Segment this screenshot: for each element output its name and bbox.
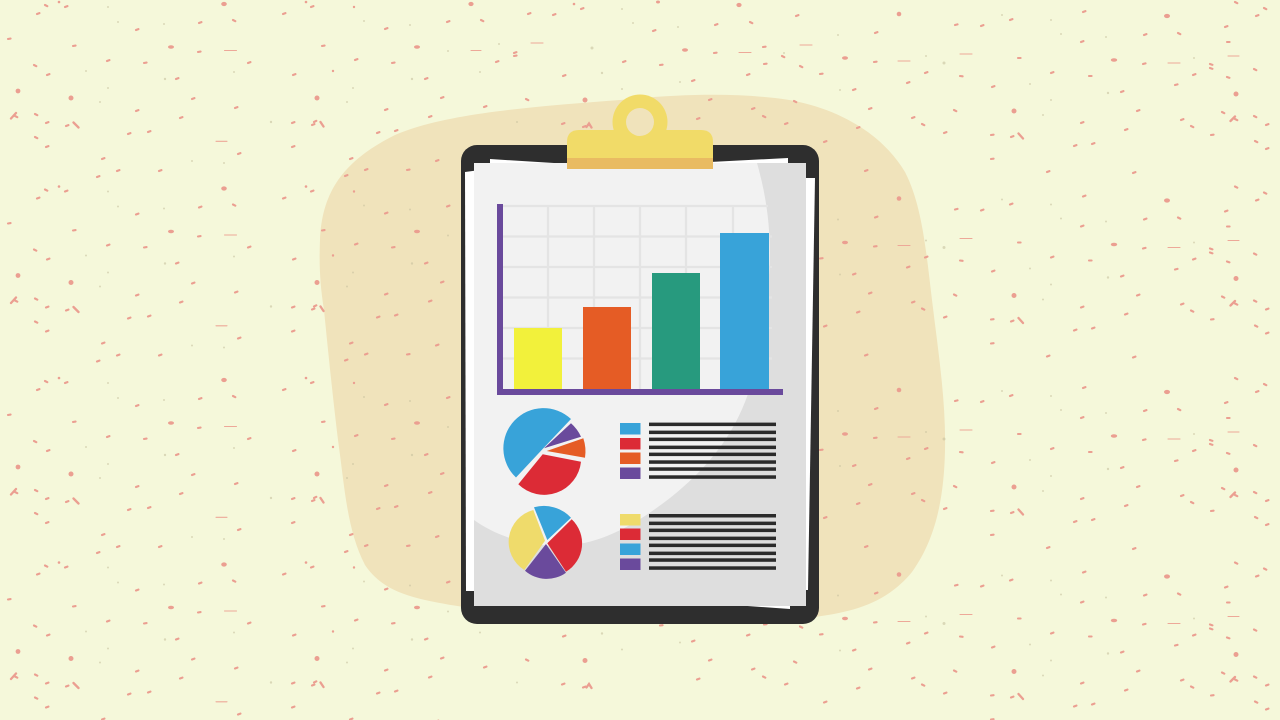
bar: yellow bbox=[514, 328, 562, 389]
clipboard bbox=[461, 94, 819, 624]
text lines bbox=[649, 514, 776, 570]
chart grid bbox=[503, 205, 772, 389]
slice: red bbox=[518, 454, 581, 495]
back sheets of paper bbox=[465, 158, 815, 609]
slice: yellow bbox=[509, 510, 545, 570]
slice: red bbox=[547, 519, 582, 572]
clip ring bbox=[612, 94, 668, 150]
chart axes bbox=[497, 204, 783, 395]
slice: orange bbox=[547, 438, 585, 458]
swatches bbox=[620, 423, 640, 479]
legend 2 bbox=[620, 514, 776, 570]
slice: purple bbox=[525, 544, 566, 579]
bar: orange bbox=[583, 307, 631, 389]
legend 1 bbox=[620, 423, 776, 479]
clip hole bbox=[626, 108, 654, 136]
front sheet bbox=[474, 163, 806, 606]
bar: blue bbox=[720, 233, 769, 389]
clip body bbox=[567, 130, 713, 158]
clip bbox=[567, 94, 713, 169]
clip band bbox=[567, 158, 713, 169]
clipboard board bbox=[461, 145, 819, 624]
text lines bbox=[649, 423, 776, 479]
background blob bbox=[320, 95, 945, 617]
slice: purple bbox=[544, 423, 581, 448]
pie chart 1 bbox=[503, 408, 585, 495]
bar: green bbox=[652, 273, 700, 389]
page shadow bbox=[474, 163, 806, 606]
slice: blue bbox=[503, 408, 571, 478]
pie chart 2 bbox=[509, 506, 582, 579]
swatches bbox=[620, 514, 640, 570]
slice: blue bbox=[534, 506, 571, 540]
bar chart bbox=[497, 204, 783, 395]
